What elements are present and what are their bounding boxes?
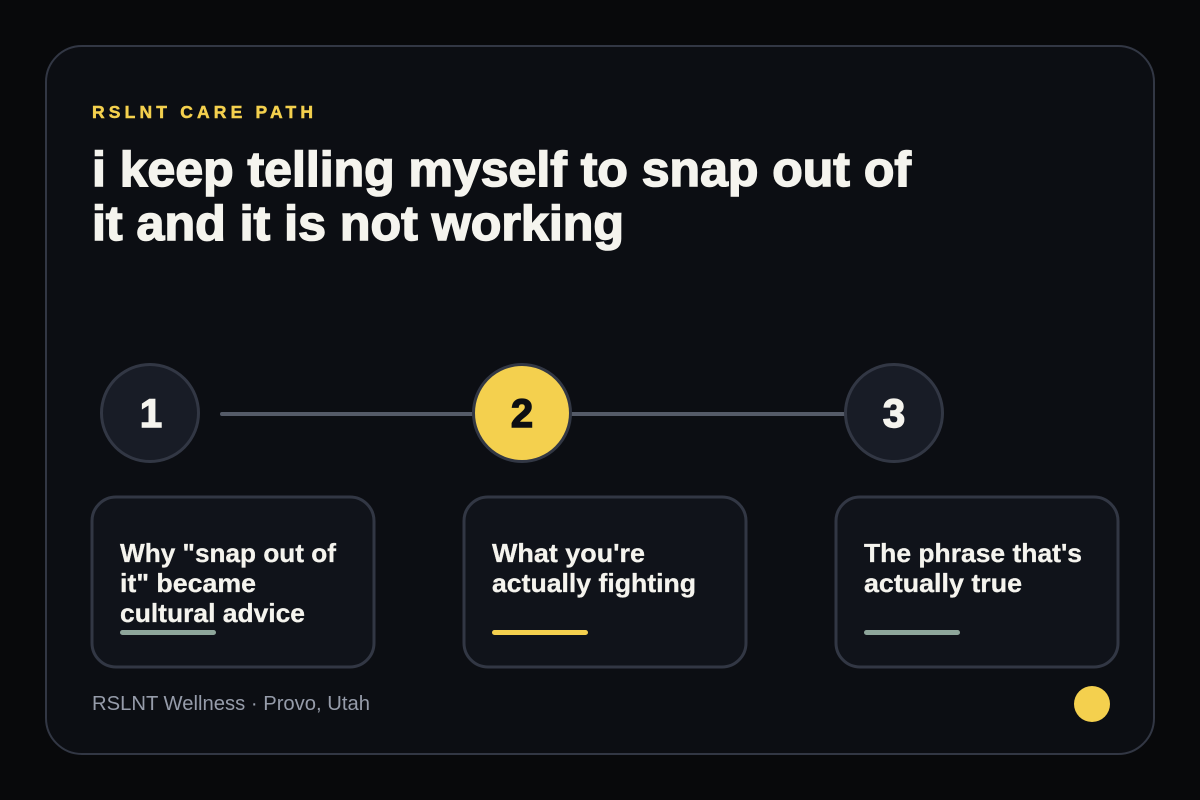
panel: step 1 card [92, 497, 374, 667]
step 3 text [864, 538, 1082, 598]
icon: yellow dot [1074, 686, 1110, 722]
step 3 text: The phrase that's [864, 538, 1082, 568]
step 1 text: it" became [120, 568, 256, 598]
step 3 text: actually true [864, 568, 1022, 598]
step 2 text: actually fighting [492, 568, 696, 598]
connector line 2 to 3 [570, 412, 846, 416]
step 1 text [120, 538, 336, 628]
step 3 circle: 3 [883, 392, 905, 436]
title [92, 143, 912, 251]
step 1 circle: 1 [140, 392, 162, 436]
panel: step 2 card [464, 497, 746, 667]
step 3 accent bar [864, 630, 960, 635]
step 1 text: cultural advice [120, 598, 305, 628]
step 2 circle: 2 [511, 392, 533, 436]
eyebrow label: RSLNT CARE PATH [92, 102, 313, 122]
step 2 circle [474, 364, 570, 462]
step 2 accent bar [492, 630, 588, 635]
connector line 1 to 2 [220, 412, 474, 416]
title: i keep telling myself to snap out of [92, 143, 912, 197]
footer text: RSLNT Wellness · Provo, Utah [92, 693, 370, 715]
step 3 circle [846, 364, 942, 462]
step 1 text: Why "snap out of [120, 538, 336, 568]
step 2 text: What you're [492, 538, 645, 568]
step 1 circle [102, 364, 198, 462]
title: it and it is not working [92, 197, 624, 251]
panel: step 3 card [836, 497, 1118, 667]
step 1 accent bar [120, 630, 216, 635]
step 2 text [492, 538, 696, 598]
